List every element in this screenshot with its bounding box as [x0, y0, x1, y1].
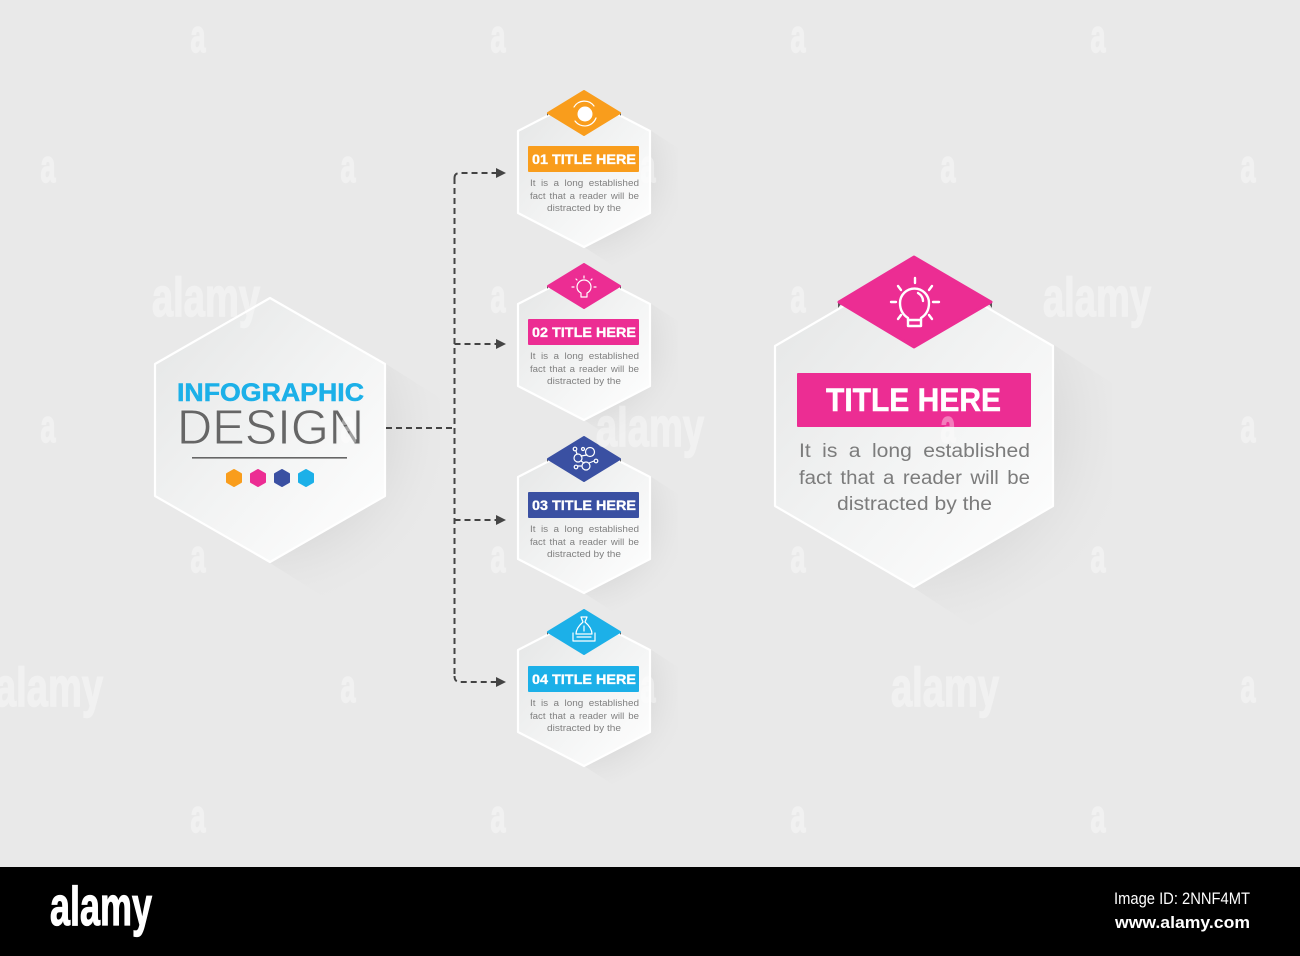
watermarks: a [640, 660, 656, 712]
description: It is a long established [530, 351, 639, 361]
panel: step 04 [518, 610, 678, 784]
heading: design: DESIGN [177, 401, 364, 455]
diamond corner folds [547, 112, 621, 116]
dashed connector with arrows [386, 168, 506, 687]
description: distracted by the [547, 376, 621, 386]
watermarks: a [640, 140, 656, 192]
diamond corner folds [547, 285, 621, 289]
description: distracted by the [547, 723, 621, 733]
watermarks: a [940, 400, 956, 452]
watermarks: a [1090, 790, 1106, 842]
description: fact that a reader will be [530, 711, 639, 721]
diamond badge [548, 91, 620, 135]
title bar [528, 492, 639, 518]
watermarks: alamy [1043, 266, 1151, 328]
diamond badge [548, 610, 620, 654]
watermarks: a [1090, 530, 1106, 582]
watermarks: a [190, 790, 206, 842]
watermarks: a [340, 140, 356, 192]
heading underline [192, 457, 347, 459]
description: It is a long established [799, 441, 1030, 462]
description: fact that a reader will be [799, 468, 1030, 489]
watermarks: alamy [596, 396, 704, 458]
description: It is a long established [530, 524, 639, 534]
watermarks: a [1240, 400, 1256, 452]
diamond badge [548, 264, 620, 308]
watermarks: alamy [152, 266, 260, 328]
footer bar [0, 867, 1300, 956]
watermarks: a [1240, 660, 1256, 712]
title: TITLE HERE [826, 382, 1001, 418]
panel: enlarged detail [775, 257, 1112, 626]
diamond badge [548, 437, 620, 481]
watermarks: a [490, 530, 506, 582]
description: distracted by the [547, 203, 621, 213]
diamond badge [839, 257, 991, 347]
watermarks: a [790, 10, 806, 62]
description: fact that a reader will be [530, 364, 639, 374]
watermarks: a [40, 400, 56, 452]
panel: step 03 [518, 437, 678, 611]
description: fact that a reader will be [530, 191, 639, 201]
title: 02 TITLE HERE [532, 324, 636, 340]
description: It is a long established [530, 178, 639, 188]
watermarks: a [190, 10, 206, 62]
watermarks: a [40, 140, 56, 192]
icon: network [573, 447, 598, 470]
description: fact that a reader will be [530, 537, 639, 547]
diamond corner folds [838, 300, 992, 308]
watermarks: a [340, 660, 356, 712]
icon: light bulb [572, 276, 596, 297]
image id: Image ID: 2NNF4MT [1114, 889, 1250, 908]
watermarks: a [340, 400, 356, 452]
panel: step 01 [518, 91, 678, 265]
title bar [528, 666, 639, 692]
watermarks: a [790, 270, 806, 322]
icon: light bulb [891, 278, 939, 326]
description [530, 178, 639, 213]
title: 01 TITLE HERE [532, 151, 636, 167]
icon: money bag on tray [573, 617, 595, 641]
description [530, 698, 639, 733]
title bar [797, 373, 1031, 427]
website: www.alamy.com [1114, 913, 1250, 932]
watermarks: a [490, 270, 506, 322]
panel: step 02 [518, 264, 678, 438]
colour hexagon dots [227, 470, 313, 486]
watermarks: a [940, 140, 956, 192]
watermarks: a [1090, 10, 1106, 62]
description: distracted by the [547, 549, 621, 559]
icon: gear with cycle arrows [574, 101, 596, 126]
watermarks: alamy [891, 656, 999, 718]
title: 03 TITLE HERE [532, 497, 636, 513]
description [799, 441, 1030, 515]
watermarks: a [790, 790, 806, 842]
watermarks: a [790, 530, 806, 582]
description [530, 351, 639, 386]
footer logo: alamy [50, 875, 152, 937]
watermarks: a [490, 10, 506, 62]
description [530, 524, 639, 559]
title bar [528, 146, 639, 172]
description: distracted by the [837, 494, 992, 515]
main hexagon panel [155, 298, 440, 597]
diamond corner folds [547, 458, 621, 462]
watermarks: a [190, 530, 206, 582]
title bar [528, 319, 639, 345]
watermarks: a [490, 790, 506, 842]
watermarks: a [1240, 140, 1256, 192]
heading: infographic: INFOGRAPHIC [177, 379, 364, 407]
description: It is a long established [530, 698, 639, 708]
title: 04 TITLE HERE [532, 671, 636, 687]
diamond corner folds [547, 631, 621, 635]
